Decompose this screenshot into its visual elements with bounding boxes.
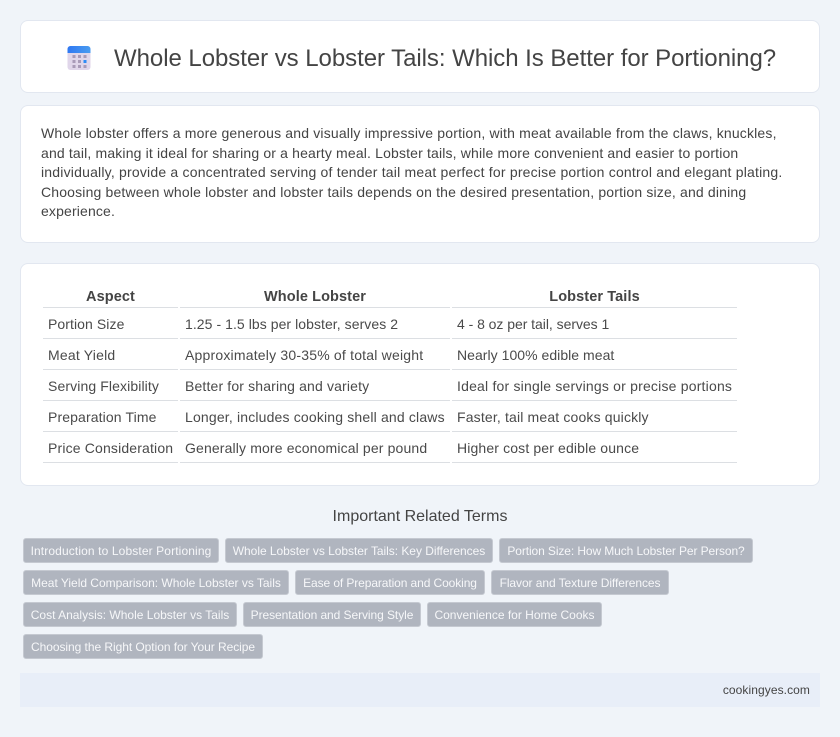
panel: summary card: [20, 105, 820, 243]
related term tags: Choosing the Right Option for Your Recipe: [31, 640, 255, 654]
text block: summary: [41, 125, 782, 219]
comparison table: Approximately 30-35% of total weight: [185, 347, 423, 363]
text block: summary: and tail, making it ideal for sharing or a hearty meal. Lobster tails, while more convenient and easier to portion: [41, 145, 738, 161]
comparison table: 4 - 8 oz per tail, serves 1: [457, 316, 609, 332]
text block: summary: individually, provide a concentrated serving of tender tail meat perfect for precise portion control and elegant plating.: [41, 164, 782, 180]
related term tags: Whole Lobster vs Lobster Tails: Key Differences: [233, 544, 485, 558]
panel: footer: [20, 673, 820, 707]
text block: summary: Whole lobster offers a more generous and visually impressive portion, with meat available from the claws, knuckles,: [41, 125, 777, 141]
related term tags: Cost Analysis: Whole Lobster vs Tails: [31, 608, 229, 622]
comparison table: Faster, tail meat cooks quickly: [457, 409, 649, 425]
heading: related terms: Important Related Terms: [333, 508, 507, 525]
related term tags: Ease of Preparation and Cooking: [303, 576, 477, 590]
comparison table: Better for sharing and variety: [185, 378, 369, 394]
comparison table: Portion Size: [48, 316, 124, 332]
comparison table: Serving Flexibility: [48, 378, 159, 394]
comparison table: Meat Yield: [48, 347, 115, 363]
related term tags: Introduction to Lobster Portioning: [31, 544, 211, 558]
related term tags: Meat Yield Comparison: Whole Lobster vs Tails: [31, 576, 281, 590]
footer source: cookingyes.com: [723, 683, 810, 697]
comparison table: 1.25 - 1.5 lbs per lobster, serves 2: [185, 316, 398, 332]
comparison table: Generally more economical per pound: [185, 440, 427, 456]
comparison table: Price Consideration: [48, 440, 173, 456]
text block: summary: Choosing between whole lobster and lobster tails depends on the desired presentation, portion size, and dining: [41, 184, 746, 200]
comparison table: Nearly 100% edible meat: [457, 347, 614, 363]
related term tags: Presentation and Serving Style: [251, 608, 413, 622]
comparison table: Aspect: [86, 289, 135, 305]
comparison table: Longer, includes cooking shell and claws: [185, 409, 445, 425]
panel: title card: [20, 20, 820, 93]
title: Whole Lobster vs Lobster Tails: Which Is Better for Portioning?: [114, 45, 776, 72]
related term tags: Portion Size: How Much Lobster Per Person?: [507, 544, 745, 558]
panel: comparison table card: [20, 263, 820, 486]
related term tags: Convenience for Home Cooks: [434, 608, 595, 622]
text block: summary: experience.: [41, 203, 115, 219]
icon: calendar: [68, 46, 90, 70]
comparison table: Preparation Time: [48, 409, 157, 425]
comparison table: Ideal for single servings or precise portions: [457, 378, 732, 394]
related term tags: [23, 538, 753, 659]
comparison table: Lobster Tails: [549, 289, 640, 305]
comparison table: Higher cost per edible ounce: [457, 440, 639, 456]
related term tags: Flavor and Texture Differences: [500, 576, 660, 590]
comparison table: Whole Lobster: [264, 289, 366, 305]
comparison table: [43, 289, 737, 463]
